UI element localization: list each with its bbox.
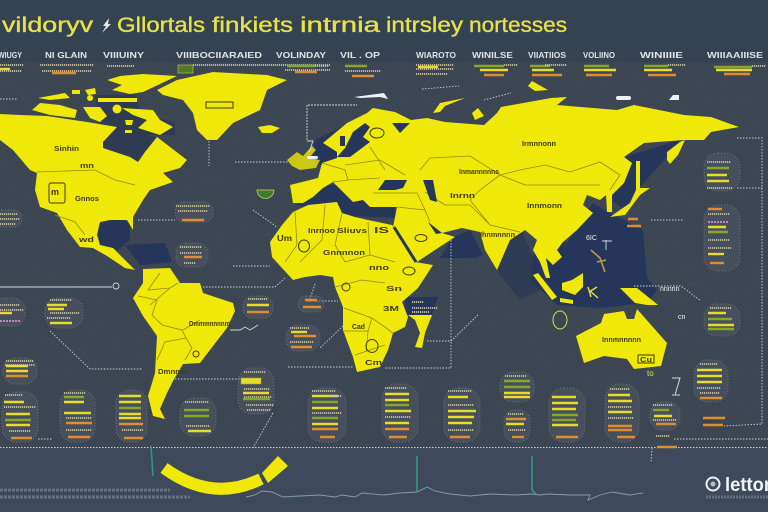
white arctic marks <box>354 93 679 100</box>
map labels: Innmonn <box>527 203 562 210</box>
map labels: Sn <box>386 286 402 293</box>
map: Sakhalin <box>667 140 685 164</box>
map labels: Ihnmnnnn <box>480 232 515 239</box>
column headers: NI GLAIN <box>45 50 87 60</box>
map labels: mn <box>80 163 94 170</box>
map: Novaya Zemlya and Arctic arc <box>433 81 548 120</box>
map labels: Dmnmn <box>158 369 187 376</box>
east Africa note <box>412 302 438 312</box>
footer text lines <box>0 490 768 497</box>
title: nortesses <box>469 14 567 37</box>
title: vildoryv <box>2 14 94 37</box>
map: British Isles <box>287 146 320 170</box>
map labels: Sliuvs <box>337 228 367 235</box>
map labels: Cm <box>365 360 382 367</box>
map: Greenland <box>157 72 287 140</box>
bar cluster: R <box>605 384 639 442</box>
map labels: wd <box>77 237 94 244</box>
column headers: VIL . OP <box>340 50 380 60</box>
footer line chart <box>151 446 643 500</box>
icon: title check mark <box>102 18 111 33</box>
east Asia label cluster <box>627 219 641 226</box>
map: Eurasia borders <box>322 147 620 232</box>
map labels: m <box>51 187 59 197</box>
map labels: Inrnn <box>450 193 475 200</box>
map labels: Cu <box>640 357 652 364</box>
map area texture <box>0 62 768 447</box>
map: Iceland <box>258 125 280 133</box>
title: intrnia <box>300 14 380 37</box>
bar cluster: D <box>2 392 38 442</box>
map: Africa <box>270 202 433 372</box>
bar cluster: L <box>286 325 320 351</box>
map: South America <box>133 268 235 419</box>
map: Eurasia <box>290 97 739 278</box>
bar cluster: B <box>45 298 83 328</box>
column headers: VOLIINO <box>583 50 615 60</box>
map: Australia <box>576 309 667 369</box>
bar cluster: O <box>500 372 534 402</box>
bar cluster: S <box>650 402 680 447</box>
bar cluster: G <box>180 398 216 436</box>
bar cluster: N <box>444 388 480 442</box>
map labels: Um <box>277 234 292 243</box>
column headers: WIIIAAIIISE <box>707 50 763 60</box>
map labels <box>49 102 654 376</box>
bar cluster: I <box>308 388 346 442</box>
connector lines <box>0 86 768 462</box>
bar cluster: T <box>694 360 728 402</box>
map: North America <box>0 74 187 270</box>
map: Madagascar <box>408 315 432 348</box>
footer band <box>0 447 768 512</box>
map labels: Inrnoo <box>308 228 335 235</box>
map labels: Gnnos <box>75 196 99 203</box>
title: Gllortals <box>117 14 205 37</box>
map labels: 3M <box>383 306 399 313</box>
column headers: WINILSE <box>472 50 513 60</box>
map: US border <box>37 170 135 235</box>
title: finkiets <box>212 14 293 37</box>
small icons on ocean: nnnnn <box>660 286 680 293</box>
map: New Guinea <box>620 288 658 305</box>
bar cluster: C <box>3 358 37 384</box>
top row mini bar charts <box>0 65 766 76</box>
small icons on ocean: to <box>647 369 654 378</box>
seas and oceans dark areas <box>95 95 680 318</box>
bar cluster: J <box>243 296 273 318</box>
bar cluster: X upper <box>704 153 740 191</box>
map labels: Irmnnonn <box>522 141 556 148</box>
bar cluster: P <box>504 410 530 442</box>
bar cluster: Q <box>549 388 585 442</box>
map labels: Innmnnnnn <box>602 337 641 344</box>
bar cluster: K <box>298 296 324 312</box>
logo <box>706 475 768 496</box>
bar cluster: X lower <box>704 205 740 271</box>
map: Japan <box>610 161 650 217</box>
map labels: Gnnnnon <box>323 250 365 257</box>
column headers: VOLINDAY <box>276 50 326 60</box>
title <box>2 14 567 37</box>
column headers: VIIATIIOS <box>528 50 566 60</box>
map: Arctic islands <box>32 74 177 135</box>
bar cluster: V <box>704 304 740 336</box>
bar cluster: F <box>116 390 147 442</box>
map: Red Sea <box>394 227 416 262</box>
footer arc <box>164 456 288 489</box>
column headers <box>0 50 763 60</box>
map labels: Inmannnnns <box>459 169 499 176</box>
bar cluster: north atlantic <box>175 202 213 222</box>
map labels: Dmmmnnnnm <box>189 321 230 328</box>
map labels: Cad <box>352 324 365 331</box>
bar cluster: left upper <box>0 298 25 326</box>
small icons on ocean: cn <box>678 314 686 321</box>
title: intrsley <box>386 14 464 37</box>
column headers: WIAROTO <box>416 50 456 60</box>
bar cluster: U <box>703 418 725 425</box>
column headers: WINIIIIE <box>640 50 683 60</box>
bar cluster: H <box>238 368 274 414</box>
bar cluster: E <box>60 390 95 442</box>
map labels: nno <box>369 265 389 272</box>
map: inland seas <box>337 123 370 157</box>
column headers: VIIIUINY <box>103 50 144 60</box>
header band <box>0 0 768 62</box>
map labels: Sinhin <box>54 146 79 153</box>
bar cluster: M <box>382 384 418 442</box>
bar cluster: Caribbean <box>176 243 208 267</box>
column headers: VIIIBOCIIARAIED <box>176 50 262 60</box>
map: Southeast Asia islands <box>533 250 606 304</box>
map labels: IS <box>374 226 390 235</box>
small icons on ocean: 6IC <box>586 235 597 242</box>
small icons on ocean <box>230 190 686 395</box>
bar cluster: west pacific <box>0 210 22 227</box>
